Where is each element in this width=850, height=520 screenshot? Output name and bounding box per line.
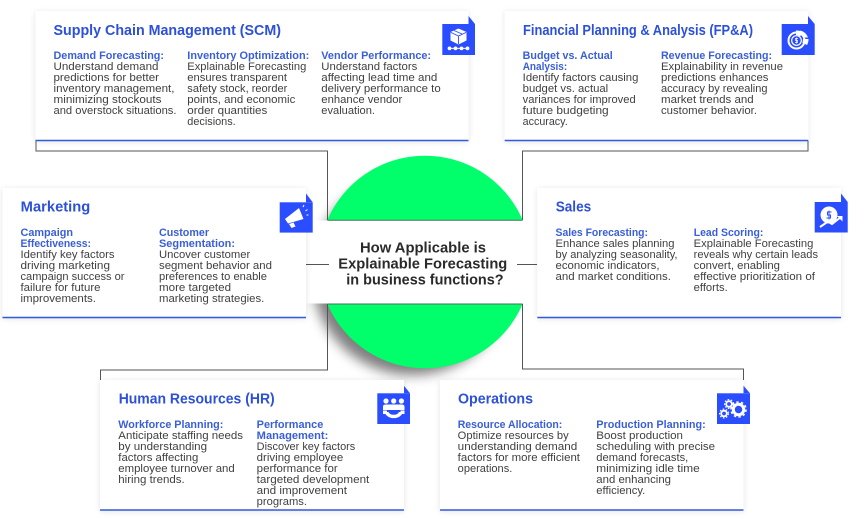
text block: lead scoring: effective prioritization of xyxy=(694,271,815,283)
text block: revenue forecasting: Revenue Forecasting: xyxy=(661,50,772,62)
text block: campaign effectiveness: failure for future xyxy=(20,282,101,294)
text block: production planning: scheduling with precise xyxy=(596,441,715,453)
text block: production planning: demand forecasts, xyxy=(596,452,688,464)
text block: vendor performance: affecting lead time and xyxy=(321,72,437,84)
text block: campaign effectiveness: Effectiveness: xyxy=(20,238,91,250)
icon: dollar pie chart xyxy=(782,16,815,55)
text block: performance management: targeted development xyxy=(257,474,369,486)
text block: performance management: performance for xyxy=(257,463,338,475)
central question text: Explainable Forecasting xyxy=(338,256,507,272)
text block: customer segmentation: preferences to enable xyxy=(159,271,267,283)
text block: inventory optimization: decisions. xyxy=(187,116,236,128)
text block: customer segmentation: Customer xyxy=(159,227,209,239)
text block: resource allocation: understanding demand xyxy=(458,441,577,453)
text block: inventory optimization: order quantities xyxy=(187,105,267,117)
text block: performance management xyxy=(257,419,369,508)
text block: performance management: Performance xyxy=(257,419,323,431)
text block: workforce planning: by understanding xyxy=(118,441,207,453)
text block: resource allocation: operations. xyxy=(458,463,512,475)
text block: sales forecasting: by analyzing seasonality, xyxy=(556,249,678,261)
text block: campaign effectiveness: campaign success or xyxy=(20,271,125,283)
text block: demand forecasting: predictions for better xyxy=(54,72,160,84)
text block: lead scoring: reveals why certain leads xyxy=(694,249,818,261)
text block: campaign effectiveness xyxy=(20,227,125,305)
text block: customer segmentation: Segmentation: xyxy=(159,238,235,250)
panel: Operations xyxy=(440,380,750,510)
text block: customer segmentation: marketing strategies. xyxy=(159,293,264,305)
text block: production planning: Boost production xyxy=(596,430,683,442)
text block: vendor performance: evaluation. xyxy=(321,105,375,117)
panel: Marketing xyxy=(2,188,313,318)
text block: performance management: programs. xyxy=(257,496,307,508)
text block: workforce planning: hiring trends. xyxy=(118,474,185,486)
text block: lead scoring: efforts. xyxy=(694,282,728,294)
text block: customer segmentation: Uncover customer xyxy=(159,249,251,261)
text block: campaign effectiveness: driving marketing xyxy=(20,260,110,272)
text block: inventory optimization: points, and economic xyxy=(187,94,296,106)
panel: Sales xyxy=(537,188,848,318)
text block: lead scoring xyxy=(694,227,818,294)
text block: demand forecasting: minimizing stockouts xyxy=(54,94,162,106)
text block: lead scoring: Explainable Forecasting xyxy=(694,238,814,250)
text block: vendor performance: enhance vendor xyxy=(321,94,403,106)
text block: inventory optimization: Inventory Optimization: xyxy=(187,50,309,62)
panel: Human Resources xyxy=(100,380,410,510)
text block: revenue forecasting: predictions enhances xyxy=(661,72,768,84)
text block: campaign effectiveness: Campaign xyxy=(20,227,73,239)
heading: SCM: Supply Chain Management (SCM) xyxy=(54,23,281,39)
text block: workforce planning xyxy=(118,419,243,486)
heading: FP&A: Financial Planning & Analysis (FP&A) xyxy=(523,23,753,39)
green centre circle xyxy=(312,156,531,375)
text block: inventory optimization: Explainable Forecasting xyxy=(187,61,306,73)
text block: workforce planning: factors affecting xyxy=(118,452,198,464)
text block: revenue forecasting xyxy=(661,50,783,117)
text block: sales forecasting: Sales Forecasting: xyxy=(556,227,648,239)
text block: resource allocation: factors for more efficient xyxy=(458,452,580,464)
heading: HR: Human Resources (HR) xyxy=(119,392,275,408)
text block: sales forecasting: economic indicators, xyxy=(556,260,660,272)
heading: Operations: Operations xyxy=(458,392,533,408)
central question text: in business functions? xyxy=(346,272,504,288)
text block: budget vs actual: variances for improved xyxy=(523,94,636,106)
text block: demand forecasting: Understand demand xyxy=(54,61,159,73)
central question band xyxy=(306,220,537,304)
panel: Supply Chain Management xyxy=(36,11,475,141)
text block: vendor performance: Understand factors xyxy=(321,61,417,73)
heading: Sales: Sales xyxy=(556,200,591,216)
text block: demand forecasting: and overstock situations. xyxy=(54,105,176,117)
text block: campaign effectiveness: Identify key factors xyxy=(20,249,114,261)
icon: megaphone xyxy=(280,194,313,233)
heading: Marketing: Marketing xyxy=(21,200,90,216)
text block: workforce planning: Workforce Planning: xyxy=(118,419,223,431)
text block: resource allocation: Optimize resources by xyxy=(458,430,569,442)
text block: inventory optimization: safety stock, reorder xyxy=(187,83,288,95)
text block: vendor performance xyxy=(321,50,441,117)
text block: budget vs actual: Analysis: xyxy=(523,61,567,73)
icon: gears xyxy=(717,386,750,424)
text block: performance management: Discover key factors xyxy=(257,441,355,453)
text block: demand forecasting: Demand Forecasting: xyxy=(54,50,164,62)
text block: production planning: Production Planning: xyxy=(596,419,706,431)
icon: package on conveyor xyxy=(442,16,475,55)
text block: revenue forecasting: market trends and xyxy=(661,94,754,106)
text block: sales forecasting: Enhance sales planning xyxy=(556,238,675,250)
text block: customer segmentation: more targeted xyxy=(159,282,231,294)
icon: team with gear xyxy=(377,386,410,424)
text block: lead scoring: convert, enabling xyxy=(694,260,780,272)
text block: revenue forecasting: customer behavior. xyxy=(661,105,757,117)
text block: workforce planning: employee turnover and xyxy=(118,463,235,475)
text block: lead scoring: Lead Scoring: xyxy=(694,227,763,239)
text block: budget vs actual: future budgeting xyxy=(523,105,609,117)
text block: performance management: Management: xyxy=(257,430,328,442)
text block: resource allocation: Resource Allocation: xyxy=(458,419,562,431)
text block: revenue forecasting: accuracy by revealing xyxy=(661,83,768,95)
text block: customer segmentation xyxy=(159,227,272,305)
text block: revenue forecasting: Explainability in revenue xyxy=(661,61,783,73)
text block: budget vs actual xyxy=(523,50,639,128)
text block: performance management: and improvement xyxy=(257,485,347,497)
text block: sales forecasting: and market conditions. xyxy=(556,271,671,283)
central question text xyxy=(338,240,507,288)
panel: Financial Planning and Analysis xyxy=(505,11,815,141)
text block: workforce planning: Anticipate staffing needs xyxy=(118,430,243,442)
text block: inventory optimization xyxy=(187,50,309,128)
text block: production planning: and enhancing xyxy=(596,474,671,486)
text block: budget vs actual: Budget vs. Actual xyxy=(523,50,613,62)
icon: dollar with rising arrow xyxy=(815,194,848,232)
connector lines xyxy=(36,141,808,380)
text block: sales forecasting xyxy=(556,227,678,283)
text block: budget vs actual: accuracy. xyxy=(523,116,568,128)
text block: demand forecasting: inventory management, xyxy=(54,83,174,95)
text block: production planning: minimizing idle time xyxy=(596,463,700,475)
text block: performance management: driving employee xyxy=(257,452,343,464)
text block: production planning xyxy=(596,419,715,497)
text block: customer segmentation: segment behavior and xyxy=(159,260,272,272)
text block: resource allocation xyxy=(458,419,580,475)
text block: production planning: efficiency. xyxy=(596,485,645,497)
text block: vendor performance: Vendor Performance: xyxy=(321,50,431,62)
text block: vendor performance: delivery performance to xyxy=(321,83,441,95)
central question text: How Applicable is xyxy=(360,240,486,256)
text block: budget vs actual: budget vs. actual xyxy=(523,83,608,95)
text block: campaign effectiveness: improvements. xyxy=(20,293,96,305)
text block: inventory optimization: ensures transparent xyxy=(187,72,287,84)
text block: budget vs actual: Identify factors causing xyxy=(523,72,639,84)
text block: demand forecasting xyxy=(54,50,176,117)
